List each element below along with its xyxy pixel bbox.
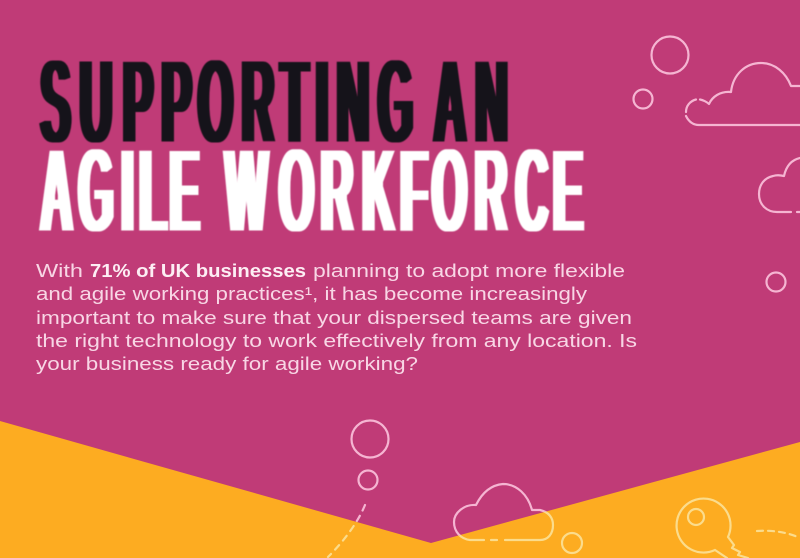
dashed trail right [757, 531, 800, 538]
intro text block: important to make sure that your dispersed teams are given [36, 307, 632, 328]
intro text block [36, 260, 637, 374]
icon: small bubble lower [358, 470, 378, 490]
yellow chevron band [0, 421, 800, 558]
intro text block: and agile working practices¹, it has become increasingly [36, 283, 588, 304]
icon: centre cloud [454, 484, 553, 540]
icon: top right cloud [686, 63, 800, 125]
icon: small bubble top [634, 90, 652, 108]
icon: right edge cloud [759, 158, 800, 212]
icon: small bubble right [766, 272, 786, 292]
icon: large bubble top [652, 36, 688, 74]
icon: small yellow bubble [562, 533, 582, 553]
intro text block: With [36, 260, 83, 281]
dashed trail left [328, 505, 365, 557]
icon: key [677, 499, 748, 558]
title: SUPPORTING AN [41, 35, 508, 170]
title: AGILE WORKFORCE [40, 124, 583, 259]
intro text block: planning to adopt more flexible [313, 260, 625, 281]
icon: large bubble lower [352, 420, 388, 458]
intro text block: the right technology to work effectively from any location. Is [36, 330, 637, 351]
title [40, 35, 583, 259]
intro text block: your business ready for agile working? [36, 353, 418, 374]
intro text block: 71% of UK businesses [90, 260, 306, 281]
